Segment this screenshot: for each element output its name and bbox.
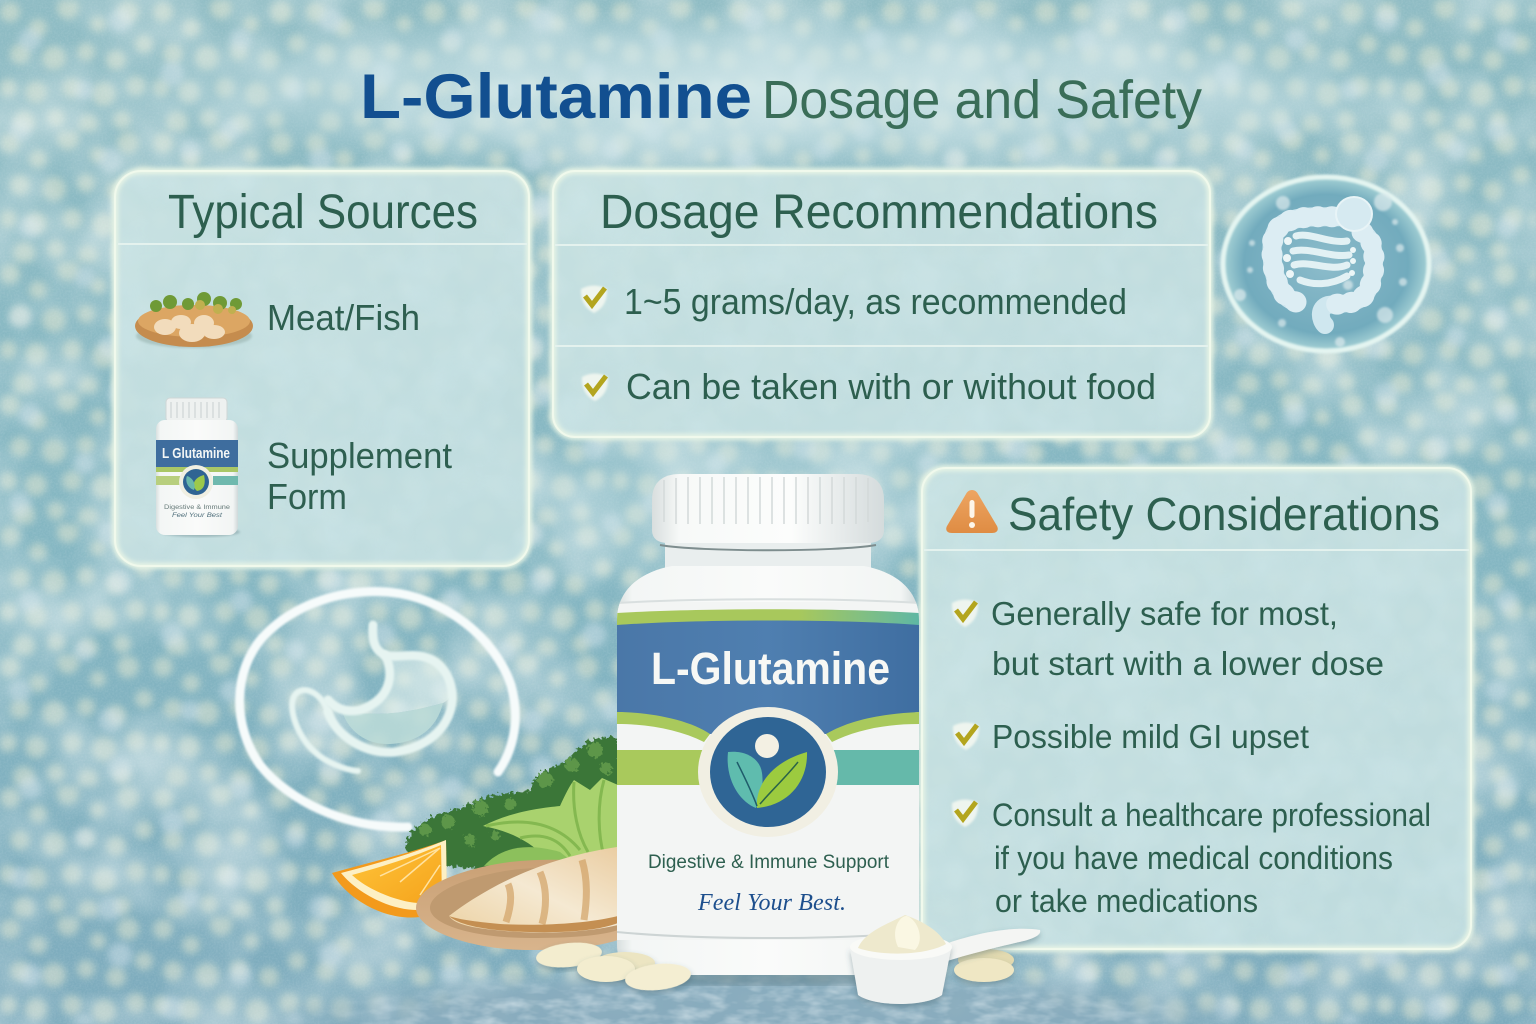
- heading: safety considerations: Safety Considerations: [1008, 488, 1440, 540]
- text: consult a professional: [992, 797, 1431, 919]
- icon: check: [582, 374, 608, 401]
- heading: dosage recommendations: Dosage Recommendations: [600, 186, 1158, 239]
- label: supplement form: Supplement: [267, 435, 452, 476]
- panel: safety considerations: [922, 468, 1471, 949]
- label name: L-Glutamine: [651, 643, 890, 694]
- illustration: orange slice: [332, 840, 447, 917]
- icon: small supplement bottle: L Glutamine: [162, 445, 230, 462]
- bottle: [603, 474, 933, 986]
- icon: small supplement bottle: Digestive & Immune: [164, 505, 231, 511]
- title: L-Glutamine: L-Glutamine: [360, 62, 752, 132]
- icon: small supplement bottle: [156, 398, 240, 537]
- text: with or without food: Can be taken with or without food: [626, 366, 1156, 407]
- icon: warning triangle: [946, 490, 998, 533]
- illustration: plate with chicken: [416, 847, 618, 950]
- icon: small supplement bottle: Feel Your Best: [172, 513, 222, 519]
- bottle neck: [665, 533, 871, 575]
- label tagline: Digestive & Immune Support: [648, 852, 890, 873]
- illustration: vegetables: [405, 737, 618, 870]
- icon: stomach in spiral: [240, 592, 515, 827]
- illustration: softgel capsules: [535, 940, 1014, 993]
- text: consult a professional: if you have medical conditions: [994, 840, 1393, 876]
- text: consult a professional: or take medications: [995, 883, 1258, 919]
- icon: check: [952, 800, 978, 827]
- label logo: [698, 707, 838, 837]
- title: Dosage and Safety: Dosage and Safety: [762, 70, 1202, 130]
- label: supplement form: [267, 435, 452, 517]
- label: supplement form: Form: [267, 476, 347, 517]
- icon: intestine in glowing orb: [1223, 177, 1429, 351]
- text: mild GI upset: Possible mild GI upset: [992, 718, 1309, 755]
- panel: dosage recommendations: [553, 171, 1210, 437]
- heading: typical sources: Typical Sources: [168, 186, 478, 239]
- bottle body: [617, 566, 919, 975]
- icon: check: [581, 286, 607, 313]
- icon: plate of meat and vegetables: [135, 292, 253, 348]
- text: generally safe: but start with a lower dose: [992, 645, 1384, 682]
- text: consult a professional: Consult a healthcare professional: [992, 797, 1431, 833]
- text: generally safe: [991, 595, 1384, 682]
- label: meat/fish: Meat/Fish: [267, 297, 420, 338]
- icon: check: [953, 722, 979, 750]
- illustration: measuring scoop with powder: [850, 915, 1040, 1004]
- bottle label: [617, 599, 919, 940]
- bottle shadow: [603, 966, 933, 986]
- label slogan: Feel Your Best.: [697, 890, 846, 916]
- stomach: [292, 625, 452, 771]
- title: [360, 62, 1202, 132]
- text: generally safe: Generally safe for most,: [991, 595, 1338, 632]
- text: daily amount: 1~5 grams/day, as recommended: [624, 281, 1127, 322]
- icon: check: [952, 600, 978, 627]
- panel: typical sources: [115, 171, 529, 566]
- spiral ring: [240, 592, 515, 827]
- bottle cap: [652, 474, 884, 550]
